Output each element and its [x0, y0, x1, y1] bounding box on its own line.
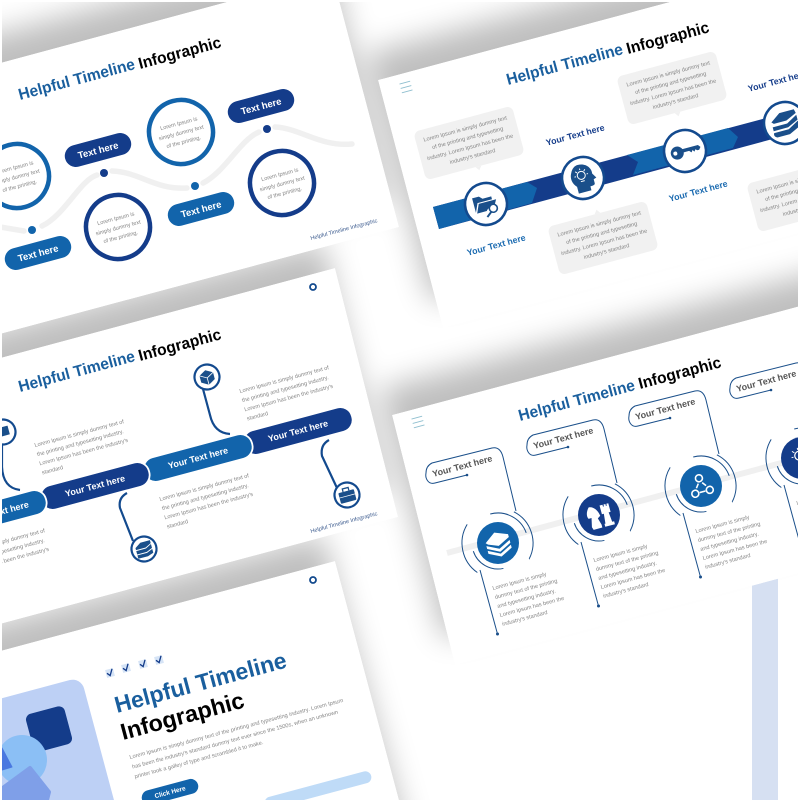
icon: folder search: [464, 182, 508, 226]
icon: chess pieces: [585, 502, 615, 531]
icon: image badge: [2, 418, 17, 446]
text block 2: Lorem Ipsum has been the industry's: [244, 384, 334, 413]
icon: head with bulb: [561, 156, 605, 200]
timeline node 1: Lorem Ipsum is simply: [492, 572, 547, 592]
ring marker: [310, 577, 316, 583]
text block 2: the printing and typesetting industry.: [241, 375, 330, 404]
icon: books: [762, 100, 798, 146]
horizontal track: [447, 458, 800, 553]
paragraph: Lorem Ipsum is simply dummy text of the printing and typesetting industry. Lorem Ipsum: [129, 698, 344, 761]
bubble 2: industry's standard: [652, 93, 699, 111]
ring marker: [310, 284, 316, 290]
icon: head with bulb: [789, 447, 800, 462]
band segment 2: Your Text here: [64, 473, 126, 499]
timeline node 2: and typesetting industry.: [598, 560, 658, 582]
pill label 1: [4, 236, 72, 270]
light progress bar: [263, 770, 373, 800]
timeline node 2: dummy text of the printing: [595, 550, 659, 573]
circle callout 1: [2, 142, 52, 210]
timeline node 3: dummy text of the printing: [697, 521, 761, 544]
bubble 2: Lorem Ipsum is simply dummy text: [626, 60, 711, 89]
timeline node 1: Lorem Ipsum has been the: [499, 596, 565, 619]
timeline node 2: Lorem Ipsum is simply: [593, 544, 648, 564]
pill label 4: [228, 89, 294, 123]
timeline node 2: Your Text here: [532, 425, 594, 451]
title: Helpful Timeline: [17, 56, 137, 104]
bubble 2: [618, 52, 726, 124]
title: [18, 38, 221, 100]
footer: Helpful Timeline Infographic: [310, 218, 378, 242]
panel: rounded band timeline slide: [0, 268, 398, 624]
panel: arrow band timeline slide: [378, 0, 800, 328]
icon: books badge: [130, 535, 158, 563]
pill label 3: [168, 192, 234, 226]
timeline node 4: [730, 363, 800, 550]
paragraph: has been the industry's standard dummy text ever since the 1500s, when an unknown: [132, 710, 339, 771]
icon: white books: [484, 529, 513, 560]
timeline node 3: industry's standard: [705, 553, 751, 571]
timeline node 1: dummy text of the printing: [494, 578, 558, 601]
band segment 4: [246, 408, 352, 454]
icon: connected people: [687, 472, 714, 498]
circle callout 4: [248, 148, 316, 218]
icon: box badge: [193, 363, 221, 391]
text block 3: Lorem Ipsum has been the industry's: [164, 492, 254, 521]
circle callout 2: simply dummy text: [95, 219, 142, 237]
title: [517, 354, 723, 425]
timeline node 2: Lorem Ipsum has been the: [600, 568, 666, 591]
paragraph: printer took a galley of type and scrambled it to make.: [134, 740, 265, 780]
band segment 3: [146, 435, 254, 481]
button: Click Here: [154, 785, 187, 800]
timeline node 3: and typesetting industry.: [700, 531, 760, 553]
band segment 2: [42, 463, 151, 509]
circle callout 4: Lorem Ipsum is: [261, 167, 299, 183]
icon: briefcase badge: [333, 481, 361, 509]
text block 3: the printing and typesetting industry.: [161, 483, 250, 512]
timeline node 1: Your Text here: [431, 453, 493, 479]
pill label 2: Text here: [77, 140, 120, 162]
circle callout 2: Lorem Ipsum is: [97, 211, 135, 227]
timeline node 4: Your Text here: [735, 368, 797, 394]
pill label 3: Text here: [180, 199, 223, 221]
text block 1: Lorem Ipsum is simply dummy text of: [34, 419, 125, 449]
panel: wave timeline slide: [0, 0, 399, 334]
bubble 1: Lorem Ipsum is simply dummy text: [423, 115, 508, 144]
title: Infographic: [637, 354, 723, 393]
timeline node 1: industry's standard: [502, 610, 548, 628]
circle callout 3: [146, 98, 216, 166]
labels: Your Text here: [466, 232, 527, 258]
title: [506, 23, 709, 85]
bubble 1: [414, 107, 524, 179]
decorative light blue vertical bar: [752, 560, 778, 800]
bubble 3: industry's standard: [583, 243, 630, 261]
text block 1: the printing and typesetting industry.: [36, 429, 125, 458]
menu icon: [412, 416, 424, 428]
band segment 3: Your Text here: [167, 445, 229, 471]
checkbox row: [105, 655, 164, 678]
labels: Your Text here: [545, 122, 606, 148]
bubble 1: industry. Lorem Ipsum has been the: [427, 133, 514, 162]
labels: Your Text here: [668, 178, 729, 204]
circle callout 4: of the printing.: [267, 186, 303, 201]
timeline node 1: [426, 448, 567, 636]
arrow band: [433, 118, 770, 229]
title: Infographic: [118, 687, 247, 745]
text block 1: standard: [41, 465, 64, 476]
bubble 4: [748, 170, 798, 231]
title: Infographic: [625, 19, 711, 58]
title: Infographic: [137, 34, 223, 73]
title: Infographic: [137, 326, 223, 365]
text block 3: standard: [166, 519, 189, 530]
icon: key: [662, 128, 708, 174]
title: Helpful Timeline: [505, 41, 625, 89]
circle callout 3: Lorem Ipsum is: [160, 116, 198, 132]
title: Helpful Timeline: [17, 348, 137, 396]
title: [18, 330, 221, 392]
bubble 1: of the printing and typesetting: [432, 126, 504, 151]
pill label 1: Text here: [17, 243, 60, 265]
pill label 2: [64, 133, 132, 167]
text block 3: Lorem Ipsum is simply dummy text of: [159, 473, 250, 503]
pill label 4: Text here: [240, 96, 283, 118]
bubble 3: of the printing and typesetting: [566, 221, 638, 246]
bubble 3: [548, 202, 658, 274]
timeline dots: [28, 125, 271, 234]
text block 2: standard: [246, 411, 269, 422]
wave line: [0, 127, 352, 231]
circle callout 2: of the printing.: [103, 230, 139, 245]
bubble 3: Lorem Ipsum is simply dummy text: [557, 210, 642, 239]
timeline node 3: Lorem Ipsum has been the: [702, 539, 768, 562]
title: Helpful Timeline: [112, 647, 289, 718]
circle callout 1: of the printing.: [2, 179, 38, 194]
bubble 3: industry. Lorem Ipsum has been the: [561, 228, 648, 257]
bubble 2: of the printing and typesetting: [635, 71, 707, 96]
circle callout 3: simply dummy text: [158, 124, 205, 142]
text block 1: Lorem Ipsum has been the industry's: [39, 438, 129, 467]
text block 2: Lorem Ipsum is simply dummy text of: [239, 365, 330, 395]
menu icon: [400, 81, 412, 93]
band segment 4: Your Text here: [267, 418, 329, 444]
bubble 2: industry. Lorem Ipsum has been the: [630, 78, 717, 107]
title: Helpful Timeline: [517, 377, 637, 425]
timeline node 3: Your Text here: [634, 396, 696, 422]
button: [140, 777, 200, 800]
circle callout 2: [84, 192, 152, 262]
connector lines: [2, 389, 337, 541]
timeline node 3: Lorem Ipsum is simply: [695, 515, 750, 535]
timeline node 3: [629, 391, 770, 578]
circle callout 4: simply dummy text: [259, 175, 306, 193]
band segment 1: [2, 491, 48, 524]
panel: circular node timeline slide: [392, 306, 800, 665]
bubble 1: industry's standard: [449, 148, 496, 166]
panel: title slide: [0, 561, 399, 800]
timeline node 2: industry's standard: [603, 582, 649, 600]
footer: Helpful Timeline Infographic: [310, 511, 378, 535]
timeline node 2: [527, 420, 668, 608]
illustration: abstract shapes: [0, 677, 125, 800]
circle callout 3: of the printing.: [166, 135, 202, 150]
labels: [466, 68, 800, 258]
timeline node 1: and typesetting industry.: [497, 588, 557, 610]
